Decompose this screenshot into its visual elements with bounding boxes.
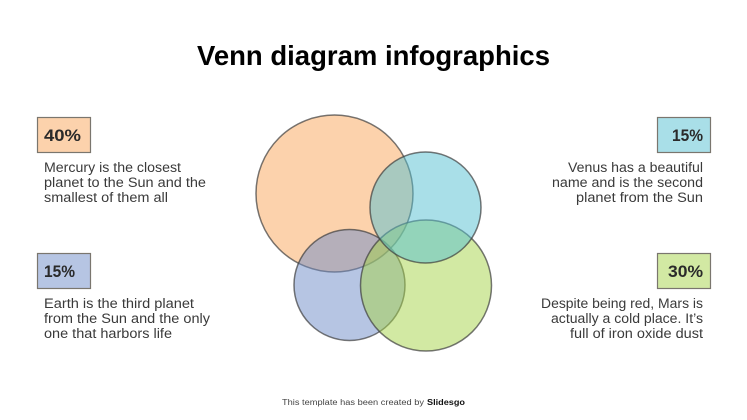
text: Venus description: name and is the second	[552, 175, 703, 190]
circle: Mars 30%	[360, 220, 492, 351]
text: Mercury description: smallest of them all	[44, 190, 168, 205]
percentage box: 15%	[658, 118, 710, 152]
panel: Mars	[541, 254, 710, 341]
panel: Venus	[552, 118, 710, 205]
text: Earth description: from the Sun and the only	[44, 311, 210, 326]
circle: Venus 15%	[370, 152, 481, 263]
footer credit	[282, 398, 465, 407]
text: Mercury description	[44, 160, 206, 205]
text: Mars description: full of iron oxide dust	[570, 326, 703, 341]
text: Mercury description: Mercury is the closest	[44, 160, 181, 175]
percentage box: 40%: 40%	[44, 127, 81, 145]
text: Venus description	[552, 160, 703, 205]
text: Mars description: actually a cold place. It’s	[551, 311, 703, 326]
circle: Earth 15%	[294, 230, 405, 340]
footer credit: Slidesgo	[427, 398, 465, 407]
percentage box: 15%: 15%	[672, 127, 703, 145]
circle: Mercury 40%	[256, 115, 413, 272]
text: Mercury description: planet to the Sun and the	[44, 175, 206, 190]
panel: Mercury	[38, 118, 206, 205]
percentage box: 40%	[38, 118, 90, 152]
panel: Earth	[38, 254, 210, 341]
percentage box: 15%: 15%	[44, 263, 75, 281]
percentage box: 15%	[38, 254, 90, 288]
text: Earth description	[44, 296, 210, 341]
text: Mars description	[541, 296, 703, 341]
text: Venus description: Venus has a beautiful	[568, 160, 703, 175]
percentage box: 30%	[658, 254, 710, 288]
text: Mars description: Despite being red, Mars is	[541, 296, 703, 311]
text: Venus description: planet from the Sun	[576, 190, 703, 205]
percentage box: 30%: 30%	[668, 263, 703, 281]
footer credit: This template has been created by	[282, 398, 424, 407]
text: Earth description: Earth is the third planet	[44, 296, 194, 311]
venn diagram	[256, 115, 492, 351]
text: Earth description: one that harbors life	[44, 326, 172, 341]
title: Venn diagram infographics	[197, 40, 550, 71]
